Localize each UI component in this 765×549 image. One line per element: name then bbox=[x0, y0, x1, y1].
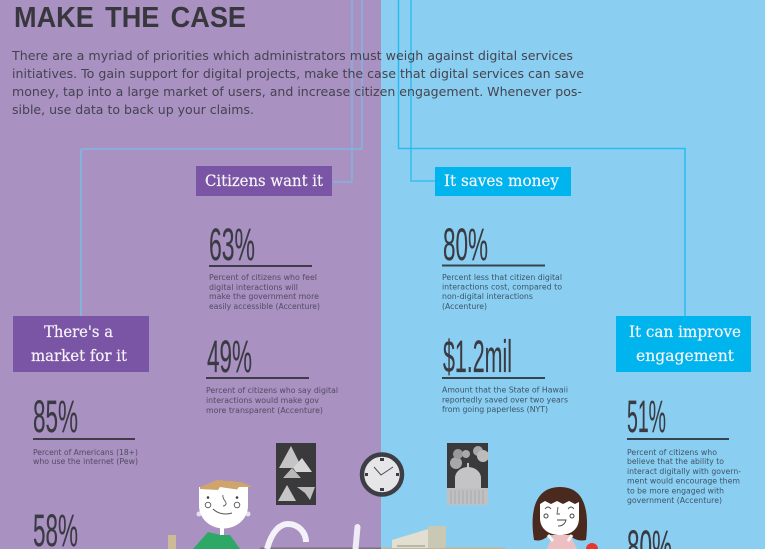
icon: triangle poster bbox=[276, 443, 316, 505]
stat: 51%: to be more engaged with bbox=[627, 486, 724, 496]
connector lines bbox=[81, 0, 685, 316]
label: there's a market for it bbox=[13, 316, 149, 372]
label: it can improve engagement: engagement bbox=[636, 346, 735, 365]
intro text: initiatives. To gain support for digital projects, make the case that digital services can save bbox=[12, 67, 584, 82]
illustration: man bbox=[193, 480, 253, 549]
icon: wall clock bbox=[362, 454, 402, 494]
title: MAKE THE CASE bbox=[14, 2, 246, 34]
label: there's a market for it: market for it bbox=[31, 346, 128, 365]
stat: $1.2mil: $1.2mil bbox=[443, 331, 512, 382]
stat: 49%: Percent of citizens who say digital bbox=[206, 386, 338, 395]
stat: 63%: Percent of citizens who feel bbox=[209, 273, 317, 282]
intro text: sible, use data to back up your claims. bbox=[12, 103, 254, 118]
stat: 80% saved: Percent less that citizen digital bbox=[442, 273, 562, 282]
stat: 51%: ment would encourage them bbox=[627, 476, 740, 486]
stat: 51%: interact digitally with govern- bbox=[627, 467, 741, 476]
stat: 49% bbox=[206, 331, 338, 415]
intro text: money, tap into a large market of users, and increase citizen engagement. Whenever pos- bbox=[12, 85, 582, 100]
stat: 80% saved: (Accenture) bbox=[442, 302, 487, 311]
stat: $1.2mil bbox=[442, 331, 568, 414]
stat: 80% saved bbox=[442, 219, 562, 311]
stat: 63%: digital interactions will bbox=[209, 283, 298, 292]
label: it saves money: It saves money bbox=[444, 171, 559, 190]
stat: 63%: make the government more bbox=[209, 292, 319, 301]
stat: 63% bbox=[209, 219, 320, 311]
stat: 49%: interactions would make gov bbox=[206, 396, 320, 405]
intro text: There are a myriad of priorities which administrators must weigh against digital services bbox=[11, 49, 573, 64]
icon: computer bbox=[392, 526, 446, 548]
stat: $1.2mil: from going paperless (NYT) bbox=[442, 405, 548, 414]
stat: 51%: believe that the ability to bbox=[627, 457, 724, 466]
stat: 49%: 49% bbox=[207, 331, 252, 382]
label: it can improve engagement bbox=[616, 316, 751, 372]
stat: 49%: more transparent (Accenture) bbox=[206, 406, 323, 415]
stat: 85% bbox=[33, 391, 138, 466]
label: citizens want it: Citizens want it bbox=[205, 171, 324, 190]
illustration: woman bbox=[533, 487, 587, 549]
stat: 85%: Percent of Americans (18+) bbox=[33, 448, 138, 457]
panel: blue background bbox=[381, 0, 765, 549]
desk bbox=[260, 548, 505, 549]
stat: $1.2mil: Amount that the State of Hawaii bbox=[442, 386, 568, 394]
stat: 80% saved: 80% bbox=[443, 219, 488, 270]
stat: 80% saved: non-digital interactions bbox=[442, 292, 533, 301]
tan chair post bbox=[168, 535, 176, 549]
icon: red ball bbox=[586, 543, 598, 549]
label: it can improve engagement: It can improve bbox=[629, 322, 741, 341]
label: it saves money bbox=[435, 167, 571, 196]
label: citizens want it bbox=[196, 166, 332, 196]
stat: 51%: 51% bbox=[627, 391, 666, 442]
stat: 51% bbox=[627, 391, 741, 505]
icon: desk lamp arc bbox=[267, 524, 306, 549]
stat: 85%: who use the internet (Pew) bbox=[33, 457, 138, 466]
stat: 63%: easily accessible (Accenture) bbox=[209, 302, 320, 311]
stat: $1.2mil: reportedly saved over two years bbox=[442, 396, 568, 404]
stat: 63%: 63% bbox=[209, 219, 255, 270]
intro text bbox=[11, 49, 584, 118]
icon: white stand bbox=[356, 527, 358, 549]
stat: 51%: Percent of citizens who bbox=[627, 448, 717, 457]
panel: purple background bbox=[0, 0, 381, 549]
stat: 80% saved: interactions cost, compared to bbox=[442, 282, 562, 292]
stat: 51%: government (Accenture) bbox=[627, 496, 722, 505]
stat: 85%: 85% bbox=[33, 391, 78, 442]
label: there's a market for it: There's a bbox=[44, 322, 113, 341]
icon: capitol poster bbox=[447, 443, 489, 505]
